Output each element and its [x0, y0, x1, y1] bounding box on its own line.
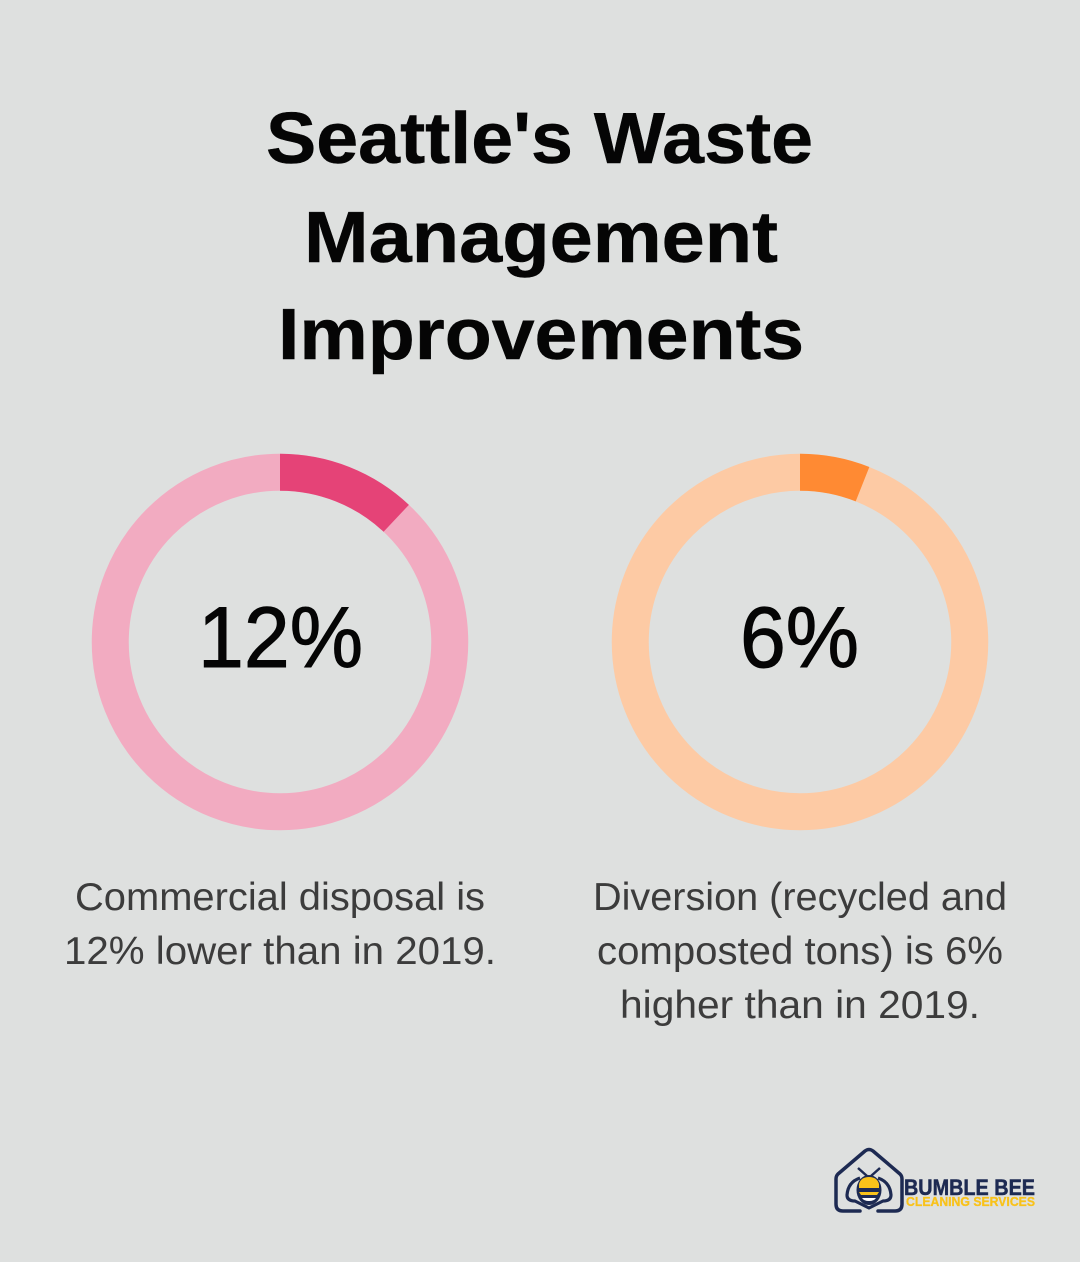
- description: diversion: higher than in 2019.: [620, 984, 980, 1027]
- wordmark: Bumble Bee: BUMBLE BEE: [904, 1175, 1035, 1200]
- description: commercial disposal: [64, 876, 496, 973]
- description: diversion: Diversion (recycled and: [593, 876, 1007, 919]
- icon: house with bee: [836, 1150, 902, 1211]
- wordmark: Cleaning Services: CLEANING SERVICES: [906, 1194, 1035, 1209]
- title: Seattle's Waste: [266, 99, 813, 179]
- description: commercial disposal: 12% lower than in 2019.: [64, 930, 496, 973]
- description: commercial disposal: Commercial disposal is: [75, 876, 485, 919]
- panel: diversion stat: [593, 472, 1007, 1027]
- donut chart: 12%: [110, 472, 450, 812]
- panel: commercial disposal stat: [64, 472, 496, 973]
- value: 6%: 6%: [740, 590, 859, 686]
- donut chart: 6%: [630, 472, 970, 812]
- description: diversion: [593, 876, 1007, 1027]
- logo: Bumble Bee Cleaning Services: [836, 1150, 1035, 1211]
- title: [266, 99, 813, 375]
- description: diversion: composted tons) is 6%: [597, 930, 1003, 973]
- value: 12%: 12%: [198, 590, 363, 686]
- title: Management: [304, 198, 778, 278]
- title: Improvements: [278, 295, 804, 375]
